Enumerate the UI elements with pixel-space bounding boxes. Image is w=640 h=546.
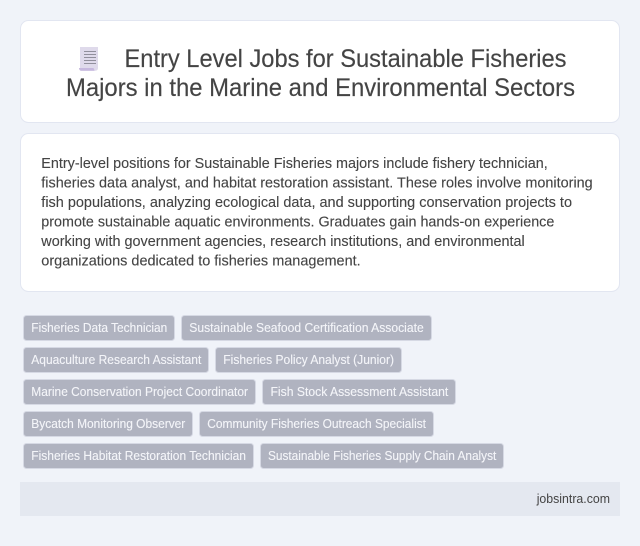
tag: Bycatch Monitoring Observer: Bycatch Monitoring Observer xyxy=(31,417,185,431)
tag: Sustainable Seafood Certification Associate: Sustainable Seafood Certification Associate xyxy=(189,321,424,335)
tag: Sustainable Fisheries Supply Chain Analyst: Sustainable Fisheries Supply Chain Analyst xyxy=(268,449,497,463)
description text xyxy=(40,155,593,270)
tag: Fisheries Policy Analyst (Junior): Fisheries Policy Analyst (Junior) xyxy=(223,353,394,367)
title text xyxy=(66,45,575,102)
tag: Community Fisheries Outreach Specialist: Community Fisheries Outreach Specialist xyxy=(207,417,427,431)
tag: Sustainable Fisheries Supply Chain Analyst xyxy=(260,444,504,468)
tag: Marine Conservation Project Coordinator xyxy=(24,380,256,404)
description text: organizations dedicated to fisheries management. xyxy=(41,252,361,270)
footer bar xyxy=(20,482,620,516)
tag: Marine Conservation Project Coordinator: Marine Conservation Project Coordinator xyxy=(31,385,248,399)
tag: Fisheries Data Technician: Fisheries Data Technician xyxy=(31,321,167,335)
tag: Community Fisheries Outreach Specialist xyxy=(200,412,434,436)
tag: Fish Stock Assessment Assistant xyxy=(262,380,456,404)
tag: Fisheries Habitat Restoration Technician: Fisheries Habitat Restoration Technician xyxy=(31,449,246,463)
panel: title card xyxy=(20,20,620,122)
panel: job tags xyxy=(24,316,504,468)
description text: promote sustainable aquatic environments. Graduates gain hands-on experience xyxy=(41,214,554,230)
description text: working with government agencies, research institutions, and environmental xyxy=(40,233,525,250)
footer bar: jobsintra.com xyxy=(536,492,610,506)
icon: scroll document xyxy=(79,47,98,71)
tag: Bycatch Monitoring Observer xyxy=(24,412,192,436)
tag: Fisheries Policy Analyst (Junior) xyxy=(216,348,402,372)
title text: Entry Level Jobs for Sustainable Fisheries xyxy=(124,45,566,73)
tag: Aquaculture Research Assistant: Aquaculture Research Assistant xyxy=(31,353,202,367)
description text: Entry-level positions for Sustainable Fisheries majors include fishery technician, xyxy=(41,155,548,172)
panel: description card xyxy=(20,134,620,292)
tag: Fisheries Data Technician xyxy=(24,316,174,340)
description text: fish populations, analyzing ecological data, and supporting conservation projects to xyxy=(41,194,572,211)
title text: Majors in the Marine and Environmental Sectors xyxy=(66,74,575,102)
tag: Fisheries Habitat Restoration Technician xyxy=(24,444,254,468)
tag: Fish Stock Assessment Assistant: Fish Stock Assessment Assistant xyxy=(270,385,449,399)
description text: fisheries data analyst, and habitat restoration assistant. These roles involve monitoring xyxy=(41,174,593,192)
tag: Aquaculture Research Assistant xyxy=(24,348,208,372)
tag: Sustainable Seafood Certification Associate xyxy=(182,316,432,340)
